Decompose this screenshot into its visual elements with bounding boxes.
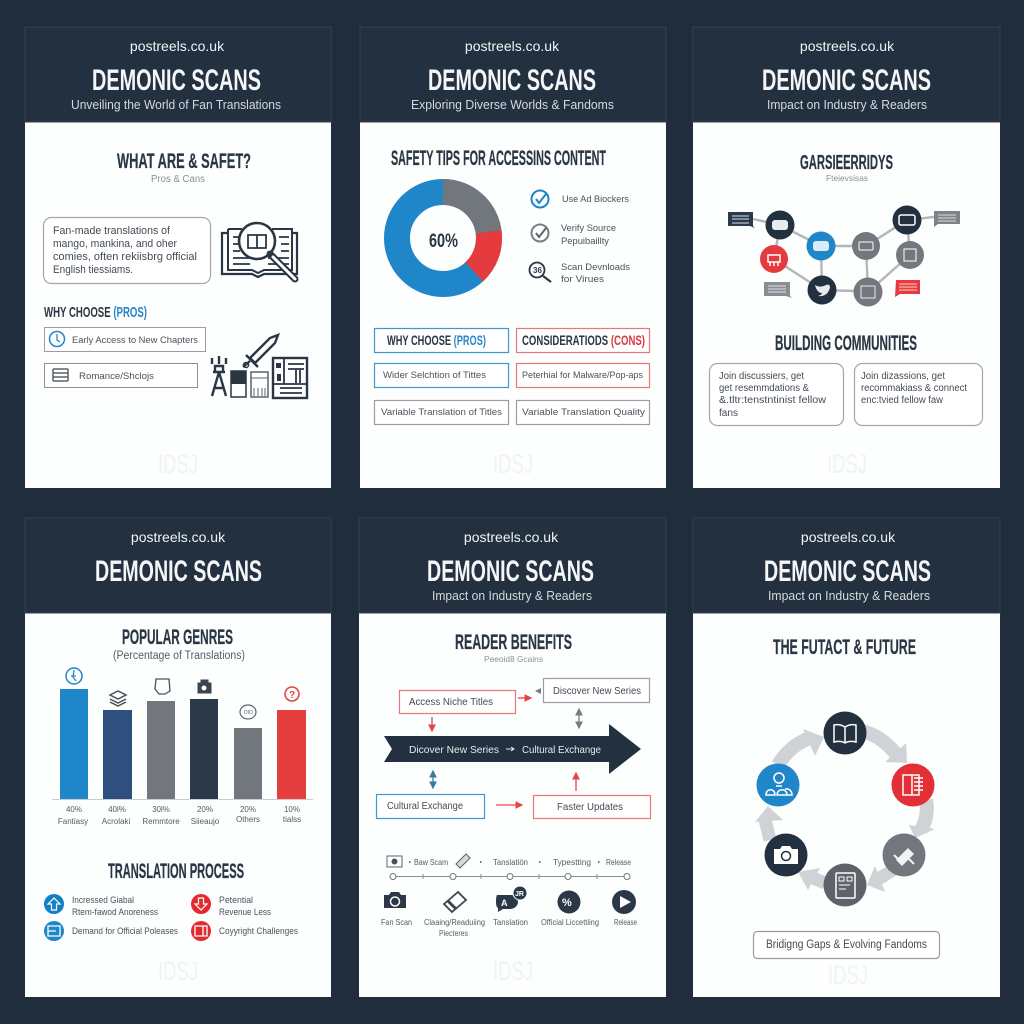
benefit: discover new series — [544, 678, 650, 702]
tip: use ad blockers — [532, 190, 629, 208]
con: variable quality — [516, 400, 650, 424]
impact: global awareness: Incressed Giabal — [72, 895, 134, 905]
impact: global awareness: Rtem-fawod Anoreness — [72, 907, 158, 917]
impact: global awareness — [44, 894, 158, 917]
benefit: access niche titles — [400, 690, 516, 714]
process step: cleaning: Piecteres — [439, 929, 468, 938]
bar labels: Others — [236, 815, 260, 824]
process step: cleaning: Claaing/Readuiing — [424, 918, 485, 927]
process step: official licensing: Official Liccettiing — [541, 918, 599, 927]
community text box left: get resemmdations & — [719, 383, 809, 394]
panel 1 header: postreels.co.uk — [130, 38, 225, 54]
bar labels: 20% — [197, 805, 213, 814]
pro: early access — [44, 328, 206, 352]
bar labels: Siieaujo — [191, 817, 220, 826]
bar chart — [52, 668, 313, 826]
panel 5 header — [359, 518, 666, 613]
process timeline: Typestting — [553, 858, 591, 867]
central arrow: Dicover New Series — [409, 744, 499, 756]
connecting arrows — [432, 691, 579, 805]
community text box left: &.tltr:tenstntinist fellow — [719, 395, 827, 406]
con: malware — [516, 364, 650, 388]
bar labels: 30l% — [152, 805, 170, 814]
definition text box: Fan-made translations of — [53, 225, 171, 237]
panel 4 heading: POPULAR GENRES — [122, 626, 233, 649]
community text box right: enc:tvied fellow faw — [861, 395, 944, 406]
impact: copyright: Coyyright Challenges — [219, 926, 298, 936]
bar labels: 10% — [284, 805, 300, 814]
panel 6 header — [693, 518, 1000, 613]
node: community — [756, 764, 800, 806]
network diagram — [728, 206, 960, 306]
benefit: faster updates: Faster Updates — [557, 802, 623, 813]
panel 4 header — [25, 518, 331, 613]
process step: fan scan — [381, 892, 412, 927]
process step: translation: A — [501, 898, 508, 908]
process step: translation: JR — [515, 891, 524, 898]
tip: scan downloads: Scan Devnloads — [561, 262, 630, 273]
definition text box: comies, often rekiisbrg official — [53, 251, 197, 263]
bar labels: tialss — [283, 815, 301, 824]
definition text box — [44, 218, 210, 284]
node: tools — [882, 834, 926, 876]
tip: verify source: Verify Source — [561, 223, 616, 234]
panel 5 header: DEMONIC SCANS — [427, 555, 594, 588]
process step: release — [612, 890, 637, 927]
icon: book and magnifier — [222, 223, 297, 279]
impact: demand — [44, 921, 178, 941]
watermark: IDSJ — [493, 449, 533, 479]
panel: reader benefits — [359, 518, 666, 997]
panel 6 header: DEMONIC SCANS — [764, 555, 931, 588]
icon: genre items with sword — [212, 335, 307, 398]
panel: communities — [693, 27, 1000, 488]
process timeline: Tanslatiön — [493, 858, 528, 867]
panel 3 header: Impact on Industry & Readers — [767, 97, 927, 112]
pro: variable titles — [374, 400, 508, 424]
process step: release: Release — [614, 918, 637, 927]
benefit: access niche titles: Access Niche Titles — [409, 697, 493, 708]
community text box right: recommakiass & connect — [861, 383, 967, 394]
process step: fan scan: Fan Scan — [381, 918, 412, 927]
tip: scan downloads — [530, 262, 630, 285]
watermark: IDSJ — [827, 449, 867, 479]
impact: copyright — [191, 921, 298, 941]
panel 2 header: Exploring Diverse Worlds & Fandoms — [411, 97, 614, 112]
community nodes — [760, 206, 924, 306]
pro: early access: Early Access to New Chapters — [72, 335, 198, 346]
panel 4 subheading: (Percentage of Translations) — [113, 650, 245, 662]
process timeline — [387, 854, 631, 880]
process timeline: Baw Scam — [414, 858, 448, 867]
pro: variable titles: Variable Translation of Titles — [381, 407, 502, 418]
tip: scan downloads: 36 — [533, 266, 542, 275]
process step: official licensing: % — [562, 897, 572, 909]
impact: demand: Demand for Official Poleases — [72, 926, 178, 936]
bar labels — [58, 805, 301, 826]
pros column header: WHY CHOOSE (PROS) — [387, 332, 486, 348]
con: variable quality: Variable Translation Quality — [522, 407, 645, 418]
central arrow: Cultural Exchange — [522, 744, 601, 756]
central arrow — [384, 724, 641, 774]
cons column header: CONSIDERATIODS (CONS) — [522, 332, 645, 348]
panel 5 heading: READER BENEFITS — [455, 631, 572, 654]
node: document — [892, 764, 934, 806]
panel 2 header — [360, 27, 666, 122]
donut chart: 60% — [429, 231, 458, 252]
pros heading: WHY CHOOSE (PROS) — [44, 304, 147, 321]
panel 3 header — [693, 27, 1000, 122]
benefit: cultural exchange — [376, 794, 484, 818]
panel: impact and future — [693, 518, 1000, 997]
tip: use ad blockers: Use Ad Biockers — [562, 194, 629, 205]
pro: wider selection — [374, 364, 508, 388]
cons column header — [516, 328, 650, 352]
panel 3 header: DEMONIC SCANS — [762, 64, 931, 97]
bar icons: ? — [289, 690, 295, 701]
panel: popular genres — [25, 518, 331, 997]
panel 5 header: postreels.co.uk — [464, 529, 559, 545]
community text box left — [710, 364, 844, 426]
pros column header — [374, 328, 508, 352]
process step: translation — [493, 886, 528, 927]
panel 2 heading: SAFETY TIPS FOR ACCESSINS CONTENT — [391, 147, 606, 170]
benefit: cultural exchange: Cultural Exchange — [387, 801, 463, 812]
panel 1 header — [25, 27, 331, 122]
panel: what are scans — [25, 27, 331, 488]
panel 6 heading: THE FUTACT & FUTURE — [773, 636, 916, 659]
panel 1 header: Unveiling the World of Fan Translations — [71, 97, 281, 112]
definition text box: mango, mankina, and oher — [53, 238, 177, 250]
impact: revenue loss — [191, 894, 271, 917]
bar labels: Acrolaki — [102, 817, 130, 826]
watermark: IDSJ — [158, 449, 198, 479]
watermark: IDSJ — [158, 956, 198, 986]
panel 3 subheading: Fteievsisas — [826, 173, 868, 183]
panel 1 header: DEMONIC SCANS — [92, 64, 261, 97]
node: tablet — [824, 864, 866, 906]
pro: romance — [44, 364, 198, 388]
pro: romance: Romance/Shclojs — [79, 371, 154, 382]
panel 1 heading: WHAT ARE & SAFET? — [117, 150, 251, 173]
bar labels: 40% — [66, 805, 82, 814]
closing statement box: Bridigng Gaps & Evolving Fandoms — [766, 939, 927, 951]
closing statement box — [754, 932, 940, 958]
panel 3 second heading: BUILDING COMMUNITIES — [775, 332, 917, 355]
bar labels: 20% — [240, 805, 256, 814]
panel 5 subheading: Peeoid8 Gcains — [484, 654, 543, 664]
panel 6 header: postreels.co.uk — [801, 529, 896, 545]
process timeline: Release — [606, 858, 631, 867]
benefit: faster updates — [534, 796, 650, 818]
panel 3 heading: GARSIEERRIDYS — [800, 152, 893, 174]
node: camera — [764, 834, 808, 876]
bar labels: Remmtore — [142, 817, 180, 826]
node: book — [824, 712, 866, 754]
chat bubbles — [728, 211, 960, 298]
process step: translation: Tanslation — [493, 918, 528, 927]
panel 6 header: Impact on Industry & Readers — [768, 588, 930, 603]
bar icons — [66, 668, 299, 719]
community text box right: Join dizassions, get — [861, 371, 945, 382]
impact: revenue loss: Revenue Less — [219, 907, 271, 917]
watermark: IDSJ — [828, 960, 868, 990]
tip: scan downloads: for Virues — [561, 274, 604, 285]
definition text box: English tiessiams. — [53, 264, 133, 276]
panel 3 header: postreels.co.uk — [800, 38, 895, 54]
watermark: IDSJ — [493, 956, 533, 986]
community text box right — [854, 364, 982, 426]
donut chart — [397, 179, 502, 284]
bar labels: Fantiasy — [58, 817, 88, 826]
process step: official licensing — [541, 890, 599, 927]
panel 4 header: DEMONIC SCANS — [95, 555, 262, 588]
panel: safety tips — [360, 27, 666, 488]
community text box left: fans — [719, 408, 738, 419]
tip: verify source — [532, 223, 616, 247]
panel 2 header: DEMONIC SCANS — [428, 64, 596, 97]
tip: verify source: Pepuibaillty — [561, 236, 609, 247]
cycle diagram — [755, 712, 935, 906]
process step: cleaning — [424, 892, 485, 938]
impact: revenue loss: Petential — [219, 895, 253, 905]
con: malware: Peterhial for Malware/Pop-aps — [522, 370, 643, 381]
cycle arrows — [755, 729, 935, 892]
panel 5 header: Impact on Industry & Readers — [432, 588, 592, 603]
translation process heading: TRANSLATION PROCESS — [108, 860, 244, 883]
panel 1 subheading: Pros & Cans — [151, 174, 205, 185]
panel 4 header: postreels.co.uk — [131, 529, 226, 545]
pro: wider selection: Wider Selchtion of Tittes — [383, 370, 486, 381]
bar labels: 40l% — [108, 805, 126, 814]
panel 2 header: postreels.co.uk — [465, 38, 560, 54]
bar icons: DIO — [244, 710, 253, 716]
benefit: discover new series: Discover New Series — [553, 686, 641, 697]
community text box left: Join discussiers, get — [719, 371, 804, 382]
